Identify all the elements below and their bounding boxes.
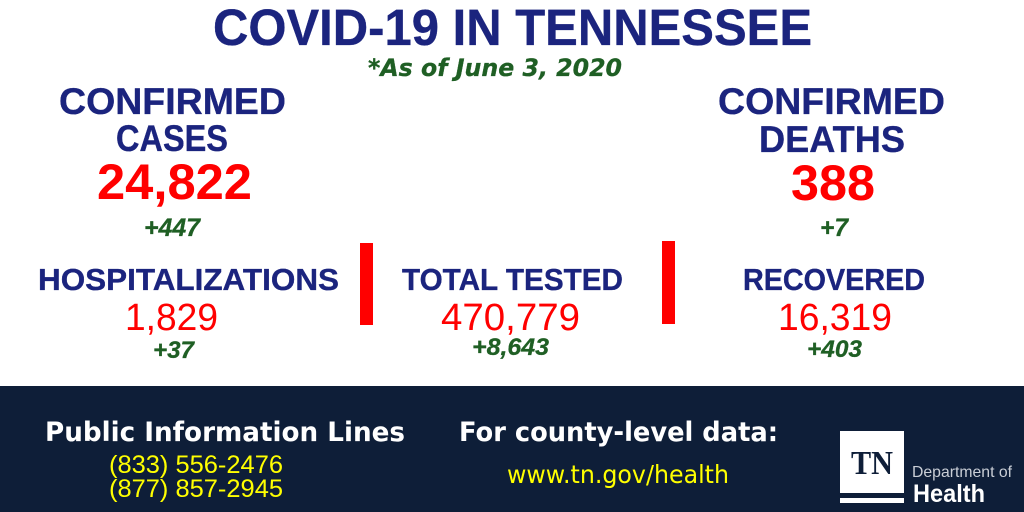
panel: confirmed deaths: DEATHS [759, 119, 905, 160]
panel: confirmed cases: CONFIRMED [59, 81, 286, 122]
panel: confirmed deaths [718, 81, 945, 242]
as-of date: *As of June 3, 2020 [368, 54, 622, 82]
panel: hospitalizations [38, 262, 339, 364]
panel: recovered [743, 262, 925, 363]
panel: recovered: +403 [807, 336, 863, 363]
panel: total tested: +8,643 [472, 334, 550, 361]
title: COVID-19 IN TENNESSEE [213, 0, 812, 56]
public information lines: (833) 556-2476 [109, 451, 283, 479]
panel: recovered: 16,319 [778, 297, 892, 339]
logo: TN Department of Health: Department of [912, 464, 1013, 481]
logo: TN Department of Health: TN [851, 445, 893, 482]
footer band [0, 386, 1024, 512]
panel: confirmed deaths: +7 [820, 214, 849, 242]
public information lines: (877) 857-2945 [109, 475, 283, 503]
panel: hospitalizations: 1,829 [125, 297, 218, 339]
logo: TN Department of Health [840, 431, 1013, 508]
panel: confirmed cases: CASES [116, 118, 228, 159]
panel: confirmed cases [59, 81, 286, 242]
panel: confirmed deaths: CONFIRMED [718, 81, 945, 122]
divider bar left [360, 243, 373, 325]
panel: confirmed cases: +447 [144, 214, 201, 242]
panel: hospitalizations: HOSPITALIZATIONS [38, 262, 339, 297]
logo: TN Department of Health: Health [913, 480, 985, 508]
panel: confirmed deaths: 388 [791, 155, 875, 211]
divider bar right [662, 241, 675, 324]
panel: total tested: 470,779 [441, 297, 580, 339]
public information lines: Public Information Lines [45, 417, 405, 448]
panel: confirmed cases: 24,822 [97, 154, 252, 210]
panel: hospitalizations: +37 [153, 337, 196, 364]
county-level data: www.tn.gov/health [507, 460, 729, 489]
panel: total tested [402, 262, 623, 361]
panel: total tested: TOTAL TESTED [402, 262, 623, 297]
county-level data: For county-level data: [459, 417, 778, 448]
county-level data [459, 417, 778, 489]
panel: recovered: RECOVERED [743, 262, 925, 297]
public information lines [45, 417, 405, 503]
